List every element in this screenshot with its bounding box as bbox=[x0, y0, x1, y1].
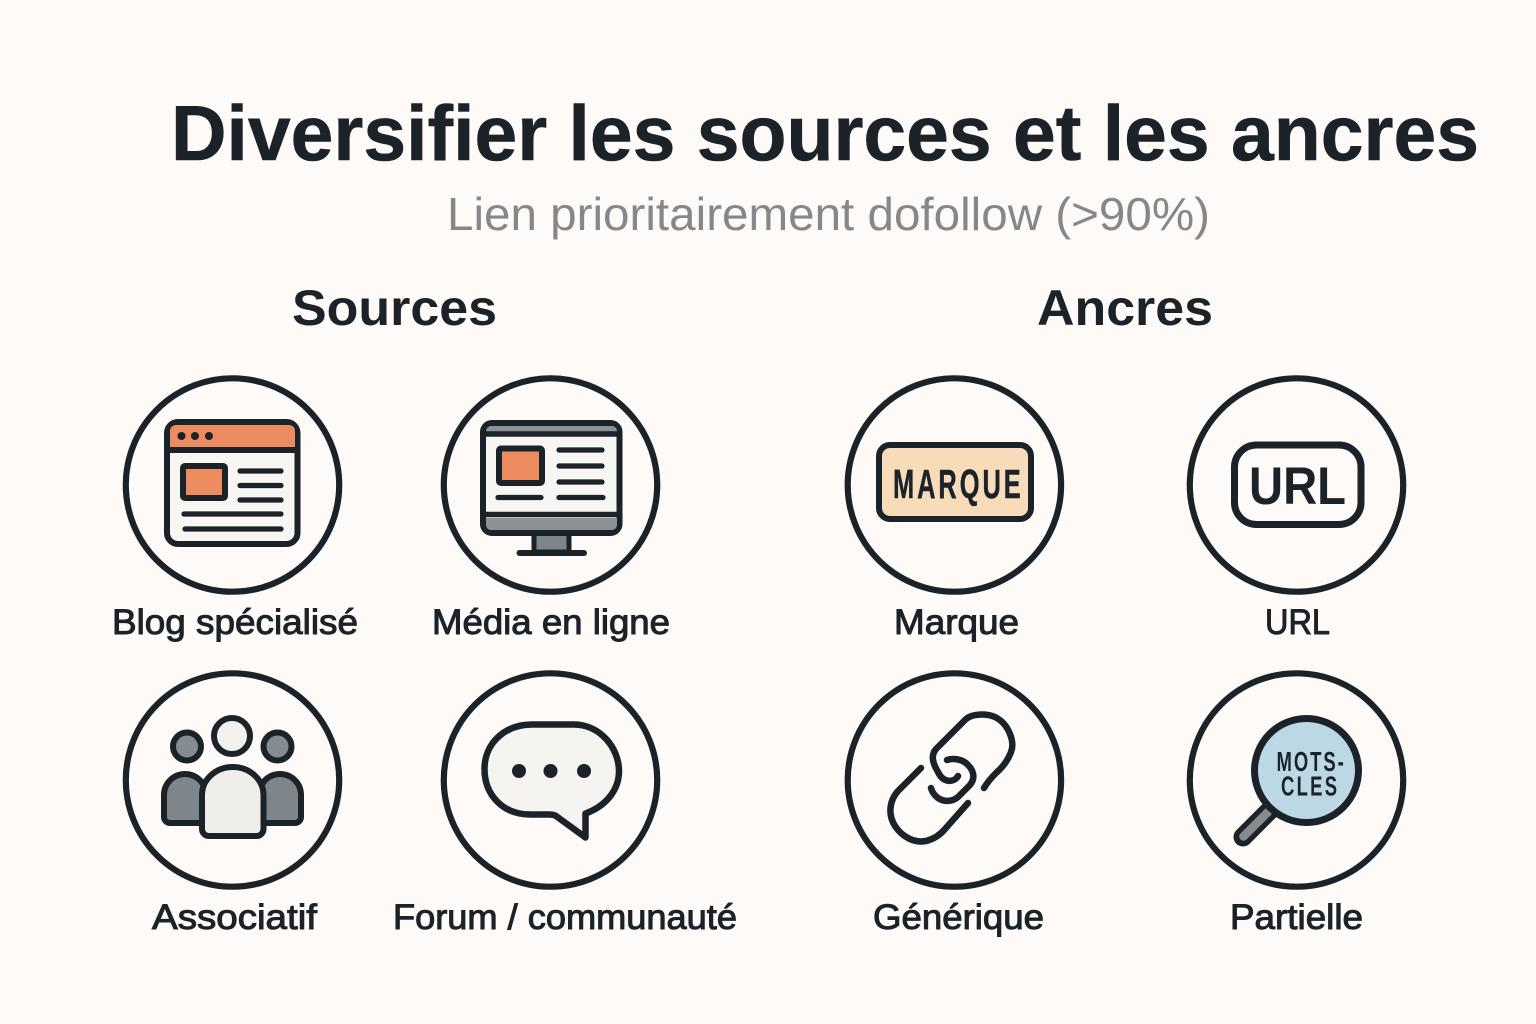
icon: magnifier with keywords bbox=[1243, 718, 1358, 837]
item: URL bbox=[1190, 378, 1403, 642]
icon: group of people bbox=[164, 718, 301, 836]
title: Diversifier les sources et les ancres bbox=[171, 89, 1479, 177]
subtitle: Lien prioritairement dofollow (>90%) bbox=[447, 188, 1210, 240]
item: Forum / communauté bbox=[393, 673, 737, 937]
label: Marque bbox=[894, 603, 1019, 642]
icon: magnifier with keywords: MOTS- bbox=[1276, 747, 1344, 778]
item: Générique bbox=[848, 673, 1061, 937]
label: Blog spécialisé bbox=[112, 603, 358, 642]
label: Associatif bbox=[152, 898, 317, 937]
label: Média en ligne bbox=[432, 603, 670, 642]
item: Partielle bbox=[1190, 673, 1403, 937]
item: Blog spécialisé bbox=[112, 378, 358, 642]
heading: Ancres: Ancres bbox=[1037, 280, 1213, 336]
icon: browser window bbox=[167, 422, 298, 544]
icon: brand tag: MARQUE bbox=[893, 462, 1021, 508]
icon: speech bubble bbox=[484, 724, 619, 838]
heading: Sources: Sources bbox=[292, 280, 497, 336]
item: Marque bbox=[848, 378, 1061, 642]
icon: URL badge: URL bbox=[1249, 457, 1346, 516]
label: Forum / communauté bbox=[393, 898, 737, 937]
icon: chain link bbox=[890, 715, 1012, 841]
icon: URL badge bbox=[1234, 445, 1361, 524]
icon: magnifier with keywords: CLES bbox=[1281, 772, 1337, 803]
label: URL bbox=[1265, 603, 1330, 642]
item: Média en ligne bbox=[432, 378, 670, 642]
label: Générique bbox=[873, 898, 1044, 937]
icon: brand tag bbox=[879, 445, 1031, 519]
icon: desktop monitor bbox=[483, 423, 620, 553]
label: Partielle bbox=[1230, 898, 1363, 937]
item: Associatif bbox=[126, 673, 339, 937]
